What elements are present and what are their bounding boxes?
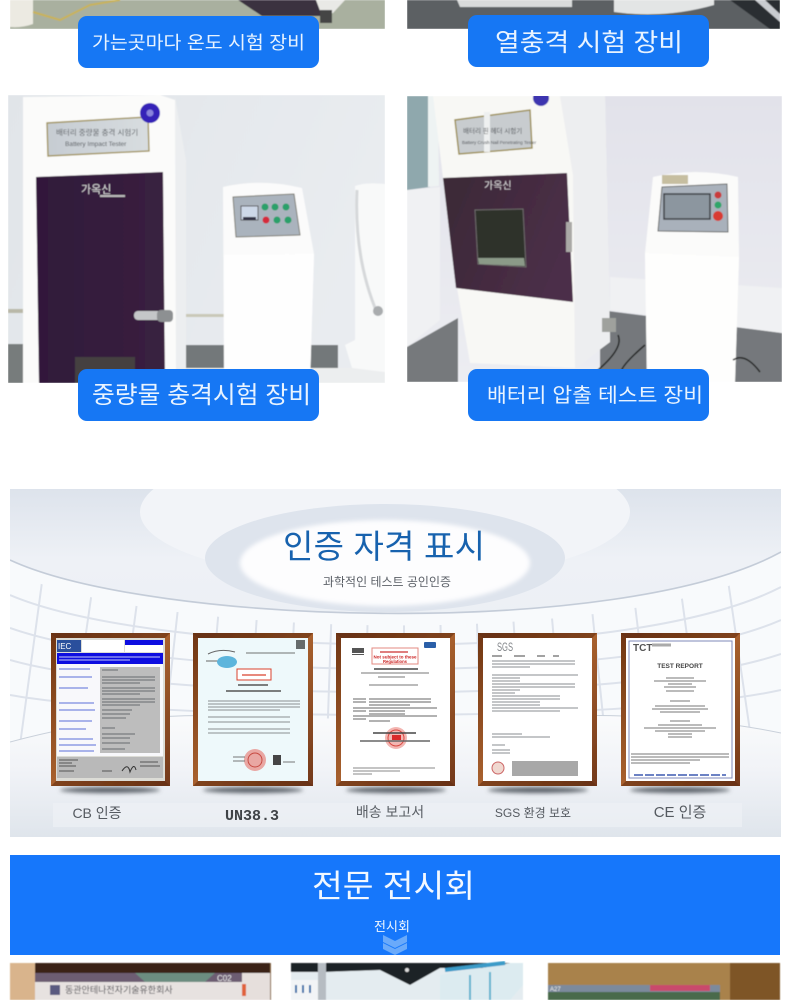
photo: thermal shock test equipment (cropped) xyxy=(407,0,780,29)
label: temperature test equipment: 가는곳마다 온도 시험 장비 xyxy=(92,33,305,53)
photo: exhibition booth C02 xyxy=(10,963,271,1000)
label: heavy impact test equipment xyxy=(78,369,319,421)
caption strip xyxy=(54,826,742,827)
impact tester cabinet xyxy=(23,95,186,383)
photo: exhibition booth C02: 동관안테나전자기술유한회사 xyxy=(65,985,173,995)
caption: CE: CE 인증 xyxy=(654,804,706,821)
certificate: shipping report: Not subject to these xyxy=(373,654,417,660)
caption: SGS: SGS 환경 보호 xyxy=(495,806,571,820)
certificate: SGS xyxy=(478,633,597,793)
certificate: CE / TCT: TCT xyxy=(633,643,652,654)
touch screen console xyxy=(645,172,739,382)
photo: exhibition booth A27: A27 xyxy=(550,987,561,993)
certificate: CB: IEC xyxy=(58,642,72,651)
crush tester cabinet xyxy=(433,90,645,378)
adjacent equipment xyxy=(345,183,385,372)
label: temperature test equipment xyxy=(78,16,319,68)
heading: 전문 전시회 xyxy=(312,868,475,904)
photo: exhibition booth C02: C02 xyxy=(217,974,232,983)
photo: temperature test equipment (cropped) xyxy=(10,0,385,29)
label: thermal shock test equipment: 열충격 시험 장비 xyxy=(495,29,683,57)
certificate: shipping report xyxy=(336,633,455,793)
label: battery crush test equipment xyxy=(468,369,709,421)
impact tester cabinet: 배터리 중량물 충격 시험기 xyxy=(56,127,138,137)
caption: CB: CB 인증 xyxy=(72,805,122,821)
panel: exhibition banner xyxy=(10,855,780,955)
icon: double chevron xyxy=(383,935,407,955)
certificate: CE / TCT xyxy=(621,633,740,793)
photo: battery crush tester xyxy=(407,90,782,382)
certificate: CB xyxy=(51,633,170,793)
crush tester cabinet: 가옥신 xyxy=(484,180,512,192)
impact tester cabinet: Battery Impact Tester xyxy=(65,141,127,148)
certificate: SGS: SGS xyxy=(497,640,513,654)
caption: shipping report: 배송 보고서 xyxy=(356,804,424,820)
caption: UN38.3: UN38.3 xyxy=(225,808,279,825)
certificate: UN38.3 xyxy=(193,633,313,793)
photo: heavy weight impact tester xyxy=(8,95,385,383)
label: thermal shock test equipment xyxy=(468,15,709,67)
photo: exhibition booth xyxy=(291,963,523,1000)
label: heavy impact test equipment: 중량물 충격시험 장비 xyxy=(92,382,311,409)
certificate: shipping report: Regulations xyxy=(383,659,408,664)
subheading: 과학적인 테스트 공인인증 xyxy=(323,575,451,589)
crush tester cabinet: Battery Crush Nail Penetrating Tester xyxy=(462,140,537,145)
label: battery crush test equipment: 배터리 압출 테스트 장비 xyxy=(487,384,703,407)
panel: certifications xyxy=(10,489,781,837)
photo: exhibition booth A27 xyxy=(548,963,780,1000)
impact tester cabinet: 가옥신 xyxy=(81,183,111,196)
crush tester cabinet: 배터리 핀 헤더 시험기 xyxy=(463,126,522,135)
showroom background xyxy=(10,489,781,837)
certificate: CE / TCT: TEST REPORT xyxy=(657,663,703,670)
subheading: 전시회 xyxy=(374,919,410,934)
control console xyxy=(223,183,314,383)
heading: 인증 자격 표시 xyxy=(283,528,485,565)
